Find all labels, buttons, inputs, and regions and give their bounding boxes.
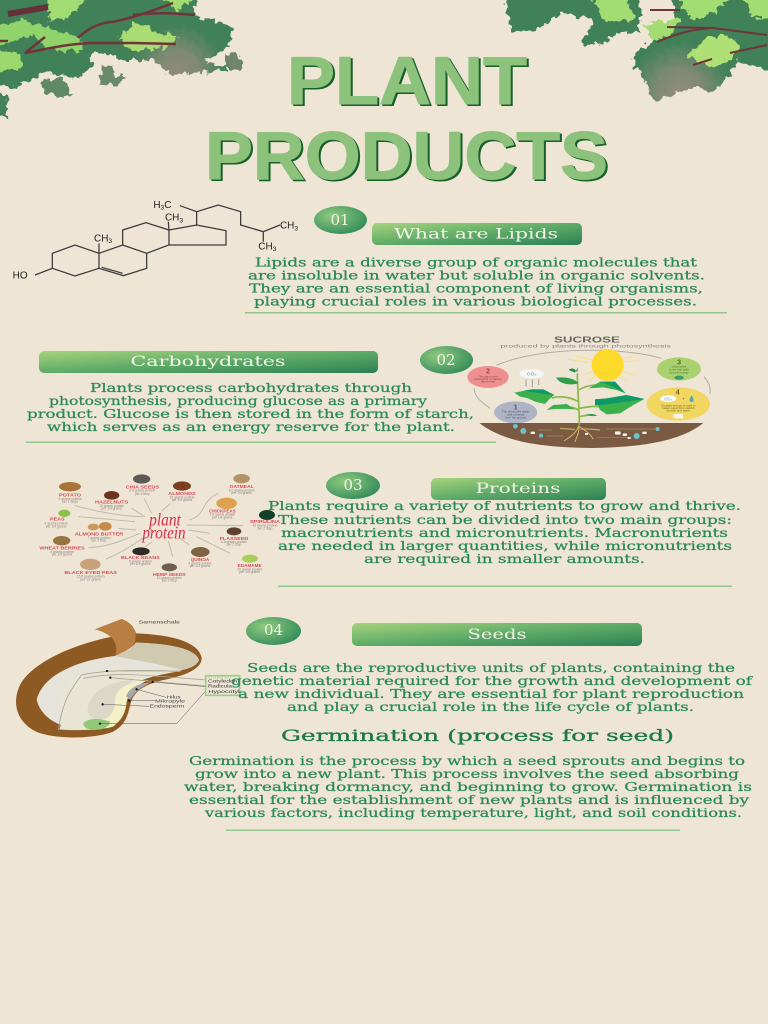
title: PLANT bbox=[287, 43, 527, 119]
seed coat bbox=[16, 619, 202, 737]
heading: What are Lipids: What are Lipids bbox=[394, 226, 558, 242]
step 4: Sunlight energy is used to bbox=[661, 403, 696, 407]
diagram: cholesterol molecule: 3 bbox=[273, 246, 277, 253]
step 2: chlorophyll to capture bbox=[474, 377, 503, 381]
protein amounts: per 2 tbsp bbox=[258, 526, 273, 530]
embryo legend box bbox=[206, 675, 240, 695]
protein amounts: 6.5 grams protein bbox=[229, 488, 255, 492]
heading: Seeds bbox=[352, 623, 642, 646]
step 2: the energy bbox=[481, 380, 496, 384]
foliage: top left bbox=[0, 0, 242, 117]
protein labels: SPIRULINA bbox=[250, 519, 281, 524]
text: germination bbox=[184, 753, 752, 820]
text: proteins: are required in smaller amounts. bbox=[364, 551, 645, 566]
diagram: seed cross-section bbox=[16, 619, 240, 737]
step 4: + bbox=[682, 397, 685, 402]
protein amounts: 10 grams protein bbox=[99, 504, 124, 508]
step 2: 2 bbox=[486, 367, 490, 376]
protein amounts: 10 grams protein bbox=[252, 524, 278, 528]
protein amounts: per 1/4 grams bbox=[190, 564, 211, 568]
seed labels bbox=[139, 619, 186, 709]
protein amounts: 15.5 grams protein bbox=[77, 575, 105, 579]
diagram: cholesterol molecule: C bbox=[164, 200, 171, 211]
badge 04 bbox=[246, 617, 301, 645]
diagram: cholesterol molecule: CH bbox=[258, 241, 273, 252]
step 4: make sugar from carbon bbox=[662, 406, 695, 410]
diagram: cholesterol molecule: CH bbox=[165, 213, 179, 224]
diagram: cholesterol molecule: CH bbox=[94, 233, 108, 244]
text: lipids bbox=[248, 254, 705, 308]
heading: Seeds: Seeds bbox=[468, 627, 526, 643]
protein labels: WHEAT BERRIES bbox=[39, 545, 85, 550]
protein amounts: 4 grams protein bbox=[58, 497, 82, 501]
badge 03: 03 bbox=[343, 476, 363, 494]
protein amounts: per 2 tbsp bbox=[135, 492, 150, 496]
protein labels: ALMONDS bbox=[168, 491, 196, 496]
sucrose heading bbox=[500, 335, 672, 348]
step 3: chloroplast bbox=[672, 365, 686, 369]
step 1: 1 bbox=[514, 402, 518, 411]
protein labels bbox=[39, 484, 281, 577]
sucrose heading: SUCROSE bbox=[554, 335, 621, 344]
step 3 bbox=[657, 357, 701, 381]
protein labels: HAZELNUTS bbox=[95, 499, 128, 504]
heading: Proteins: Proteins bbox=[476, 481, 560, 497]
protein amounts: per 1/4 grams bbox=[212, 515, 233, 519]
title: PRODUCTS bbox=[207, 120, 610, 196]
text: germination: water, breaking dormancy, and beginning to grow. Germination is bbox=[184, 779, 752, 794]
title bbox=[205, 43, 610, 196]
protein labels: ALMOND BUTTER bbox=[75, 532, 124, 537]
heading: Carbohydrates: Carbohydrates bbox=[130, 354, 286, 370]
text: proteins: These nutrients can be divided into two main groups: bbox=[278, 512, 732, 527]
protein amounts: per 2 tbsp bbox=[92, 539, 107, 543]
embryo tissue bbox=[59, 668, 182, 730]
protein labels: HEMP SEEDS bbox=[153, 572, 186, 577]
protein amounts: 7.6 grams protein bbox=[209, 513, 235, 517]
protein amounts: per 1/2 grams bbox=[80, 577, 101, 581]
step 1 bbox=[494, 401, 537, 423]
text: lipids: Lipids are a diverse group of organic molecules that bbox=[255, 254, 697, 270]
embryo legend box: Embryo bbox=[208, 675, 232, 680]
text: germination: grow into a new plant. This process involves the seed absorbing bbox=[195, 766, 739, 781]
protein labels: FLAXSEED bbox=[220, 536, 248, 541]
badge 01: 01 bbox=[330, 211, 350, 229]
text: lipids: They are an essential component of living organisms, bbox=[249, 280, 703, 296]
protein foods bbox=[53, 474, 258, 571]
text: carbohydrates: Plants process carbohydrates through bbox=[90, 380, 412, 395]
diagram: cholesterol molecule: 3 bbox=[108, 238, 112, 245]
protein amounts: per 1 large bbox=[62, 500, 78, 504]
protein labels: OATMEAL bbox=[230, 484, 254, 489]
text: carbohydrates: product. Glucose is then stored in the form of starch, bbox=[27, 406, 474, 421]
protein amounts: 7 grams protein bbox=[87, 536, 111, 540]
text: seeds bbox=[231, 660, 754, 714]
badge 04: 04 bbox=[264, 621, 283, 639]
protein amounts: per 1/4 grams bbox=[231, 491, 252, 495]
text: germination: essential for the establishment of new plants and is influenced by bbox=[189, 792, 750, 807]
step 4 bbox=[647, 387, 710, 421]
embryo legend box: Hypocotyl bbox=[208, 689, 240, 694]
heading: Carbohydrates bbox=[39, 351, 378, 373]
protein labels: CHIA SEEDS bbox=[126, 485, 159, 490]
text: seeds: Seeds are the reproductive units of plants, containing the bbox=[247, 660, 735, 675]
step 2 bbox=[467, 366, 509, 388]
step 3: 3 bbox=[677, 357, 681, 366]
text: proteins: are needed in larger quantities, while micronutrients bbox=[278, 538, 732, 553]
diagram: cholesterol molecule: H bbox=[153, 200, 161, 211]
seed labels: Mikropyle bbox=[155, 699, 186, 704]
step 1: from the ground bbox=[505, 416, 527, 420]
protein labels: CHICKPEAS bbox=[209, 508, 236, 513]
protein amounts: 6-8 grams protein bbox=[221, 540, 247, 544]
protein labels: PEAS bbox=[50, 517, 65, 522]
endosperm bbox=[37, 643, 199, 730]
protein labels: BLACK EYED PEAS bbox=[64, 570, 117, 575]
diagram: cholesterol molecule: HO bbox=[13, 271, 28, 282]
protein labels: EDAMAME bbox=[238, 563, 262, 568]
text: carbohydrates: which serves as an energy reserve for the plant. bbox=[47, 419, 455, 434]
heading: What are Lipids bbox=[372, 223, 582, 245]
text: proteins: Plants require a variety of nutrients to grow and thrive. bbox=[268, 498, 741, 513]
protein labels: BLACK BEANS bbox=[121, 555, 160, 560]
protein arrows bbox=[75, 493, 243, 559]
protein amounts: per 1/4 grams bbox=[130, 562, 151, 566]
protein amounts bbox=[44, 488, 278, 583]
protein amounts: 6-8 grams protein bbox=[129, 489, 156, 493]
seed labels: Endosperm bbox=[150, 704, 184, 709]
diagram: cholesterol molecule: 3 bbox=[294, 225, 298, 232]
co2 cloud bbox=[519, 369, 544, 387]
foliage: top right bbox=[505, 0, 768, 102]
step 1: and minerals bbox=[507, 413, 525, 417]
protein amounts: per 1/4 grams bbox=[101, 507, 122, 511]
title: PLANT bbox=[289, 44, 529, 120]
embryo legend box: Radicula bbox=[208, 684, 233, 689]
co2 cloud: CO₂ bbox=[527, 372, 537, 378]
step 1: The plant pulls water bbox=[502, 410, 529, 414]
heading: germination: Germination (process for seed) bbox=[281, 726, 674, 745]
sucrose heading: produced by plants through photosynthesis bbox=[500, 343, 672, 348]
step 3: absorb energy bbox=[669, 371, 689, 375]
text: carbohydrates: photosynthesis, producing glucose as a primary bbox=[49, 393, 428, 408]
protein labels: QUINOA bbox=[191, 557, 210, 562]
text: proteins bbox=[268, 498, 741, 566]
text: lipids: playing crucial roles in various biological processes. bbox=[254, 294, 697, 308]
text: germination: Germination is the process by which a seed sprouts and begins to bbox=[189, 753, 745, 768]
step 2: The plant uses bbox=[478, 374, 498, 378]
embryo legend box: Cotyledon bbox=[208, 679, 238, 684]
diagram: plant protein bbox=[39, 474, 281, 583]
plant protein lettering: plant bbox=[147, 510, 182, 530]
step 4: dioxide and water bbox=[667, 409, 690, 413]
text: seeds: genetic material required for the growth and development of bbox=[231, 673, 754, 688]
text: seeds: and play a crucial role in the life cycle of plants. bbox=[287, 699, 694, 714]
text: seeds: a new individual. They are essential for plant reproduction bbox=[238, 686, 744, 701]
protein amounts: 4 grams protein bbox=[50, 550, 74, 554]
text: proteins: macronutrients and micronutrients. Macronutrients bbox=[281, 525, 728, 540]
seed leader lines bbox=[100, 682, 207, 724]
protein amounts: per 2 tbsp bbox=[227, 543, 242, 547]
protein amounts: 5 grams protein bbox=[129, 559, 152, 563]
heading: Proteins bbox=[431, 478, 606, 500]
step 4: CO₂ bbox=[664, 396, 673, 401]
diagram: cholesterol molecule bbox=[13, 200, 298, 282]
protein amounts: 4 grams protein bbox=[44, 521, 68, 525]
protein amounts: per 1/4 grams bbox=[239, 570, 260, 574]
plant protein lettering: protein bbox=[141, 522, 186, 542]
sun bbox=[568, 349, 638, 382]
protein labels: POTATO bbox=[59, 492, 82, 497]
plant protein lettering bbox=[141, 510, 186, 542]
seed labels: Samenschale bbox=[139, 619, 181, 624]
diagram: cholesterol molecule: 3 bbox=[179, 217, 183, 224]
diagram: cholesterol molecule: 3 bbox=[161, 205, 165, 212]
title: PRODUCTS bbox=[205, 118, 608, 194]
badge 02: 02 bbox=[436, 351, 456, 369]
protein amounts: 15 grams protein bbox=[237, 567, 262, 571]
step 4: 4 bbox=[676, 387, 681, 396]
soil bbox=[479, 423, 703, 448]
protein amounts: per 2 tbsp bbox=[162, 579, 177, 583]
step 3: in the leaf cells bbox=[669, 368, 689, 372]
diagram: cholesterol molecule: CH bbox=[280, 221, 294, 232]
protein amounts: per 1/4 grams bbox=[46, 524, 67, 528]
protein amounts: per 1/4 grams bbox=[52, 553, 73, 557]
protein amounts: 10 grams protein bbox=[157, 576, 182, 580]
text: carbohydrates bbox=[27, 380, 474, 434]
badge 01 bbox=[314, 206, 367, 234]
badge 02 bbox=[420, 346, 473, 374]
seed labels: Hilus bbox=[167, 695, 182, 700]
diagram: sucrose photosynthesis bbox=[467, 335, 710, 448]
plant bbox=[514, 367, 644, 425]
text: lipids: are insoluble in water but soluble in organic solvents. bbox=[248, 268, 705, 282]
protein amounts: per 1/4 grams bbox=[172, 498, 193, 502]
badge 03 bbox=[326, 472, 380, 499]
protein amounts: 4 grams protein bbox=[188, 561, 212, 565]
protein amounts: 10 grams protein bbox=[169, 495, 195, 499]
text: germination: various factors, including temperature, light, and soil conditions. bbox=[204, 805, 742, 820]
icon: spirulina bowl bbox=[259, 510, 275, 520]
roots and minerals bbox=[513, 424, 660, 442]
